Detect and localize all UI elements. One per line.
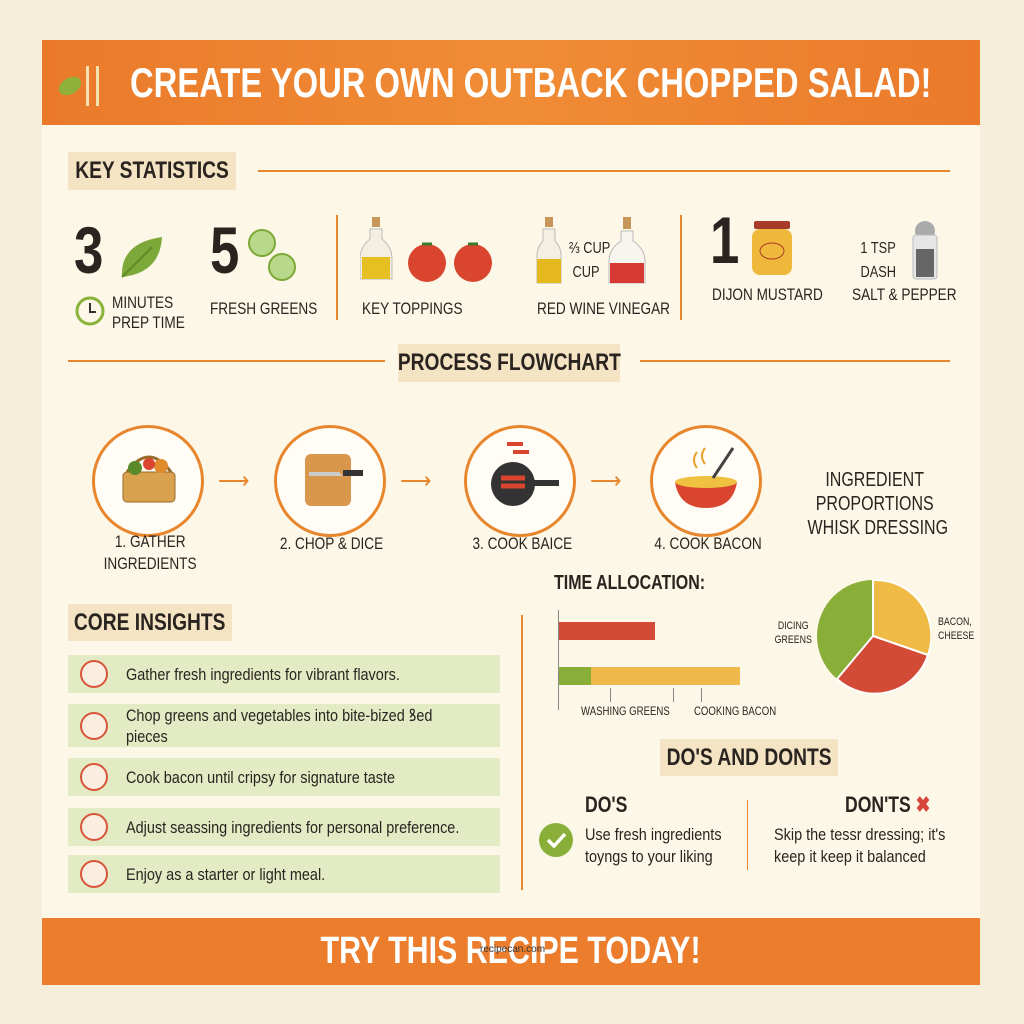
icon: leaf and fork — [58, 66, 99, 106]
header banner — [42, 40, 980, 125]
stat: 3 minutes — [74, 213, 185, 332]
stat: red wine vinegar: RED WINE VINEGAR — [537, 299, 670, 318]
heading: core insights: CORE INSIGHTS — [74, 608, 226, 636]
stat: 3 minutes: MINUTES — [112, 293, 173, 312]
flow step 1: 1. GATHER — [115, 532, 185, 551]
bar chart: time allocation: TIME ALLOCATION: — [554, 572, 705, 594]
pie chart: BACON, — [938, 616, 972, 628]
pie chart: GREENS — [775, 634, 812, 646]
do's: toyngs to your liking — [585, 847, 713, 866]
ingredient proportions text — [808, 469, 948, 539]
flow step 1: INGREDIENTS — [104, 554, 196, 573]
heading: core insights — [68, 604, 232, 641]
footer banner — [42, 918, 980, 985]
pie chart: CHEESE — [938, 630, 974, 642]
stat: salt & pepper — [852, 221, 957, 304]
ingredient proportions text: PROPORTIONS — [816, 493, 934, 515]
don'ts: keep it keep it balanced — [774, 847, 926, 866]
flow step 3 — [464, 425, 576, 553]
flow step 1 — [92, 425, 204, 573]
stat: dijon mustard: 1 — [710, 203, 739, 277]
flow step 2: 2. CHOP & DICE — [280, 534, 384, 553]
stat: 5 fresh greens: 5 — [210, 213, 239, 287]
flow step 3: 3. COOK BAICE — [472, 534, 572, 553]
stat: dijon mustard: DIJON MUSTARD — [712, 285, 823, 304]
insights list: Adjust seassing ingredients for personal preference. — [126, 818, 459, 836]
arrow: ⟶ — [400, 468, 432, 493]
heading: do's and don'ts — [660, 739, 838, 776]
stat: red wine vinegar: CUP — [573, 264, 600, 281]
pie chart — [775, 579, 974, 694]
stats row — [74, 203, 957, 332]
stat: 3 minutes: PREP TIME — [112, 313, 185, 332]
stat: key toppings — [360, 217, 492, 318]
insights list: Enjoy as a starter or light meal. — [126, 864, 325, 884]
do's: Use fresh ingredients — [585, 825, 722, 844]
stat: red wine vinegar — [536, 217, 670, 318]
do's — [539, 792, 722, 866]
flow step 4: 4. COOK BACON — [654, 534, 762, 553]
flow step 2 — [274, 425, 386, 553]
bar chart: time allocation: WASHING GREENS — [581, 704, 670, 718]
stat: red wine vinegar: ⅔ CUP — [569, 240, 610, 257]
do's: DO'S — [585, 792, 627, 817]
stat: key toppings: KEY TOPPINGS — [362, 299, 463, 318]
stat: 3 minutes: 3 — [74, 213, 103, 287]
don'ts: DON'TS ✖ — [845, 792, 930, 817]
title: CREATE YOUR OWN OUTBACK CHOPPED SALAD! — [130, 58, 932, 106]
ingredient proportions text: INGREDIENT — [826, 469, 924, 491]
flow step 4 — [650, 425, 762, 553]
insights list: Gather fresh ingredients for vibrant flavors. — [126, 664, 400, 684]
insights list — [68, 655, 500, 893]
don'ts — [774, 792, 945, 866]
stat: 5 fresh greens — [210, 213, 317, 318]
bar chart: time allocation: COOKING BACON — [694, 704, 776, 718]
heading: do's and don'ts: DO'S AND DONTS — [667, 744, 831, 770]
arrow: ⟶ — [218, 468, 250, 493]
arrow: ⟶ — [590, 468, 622, 493]
stat: dijon mustard — [710, 203, 823, 304]
ingredient proportions text: WHISK DRESSING — [808, 517, 948, 539]
stat: salt & pepper: SALT & PEPPER — [852, 285, 957, 304]
stat: salt & pepper: DASH — [860, 264, 896, 281]
stat: 5 fresh greens: FRESH GREENS — [210, 299, 317, 318]
footer banner: TRY THIS RECIPE TODAY! — [321, 930, 701, 972]
heading: key statistics: KEY STATISTICS — [75, 157, 229, 184]
stat: salt & pepper: 1 TSP — [861, 240, 896, 257]
insights list: Chop greens and vegetables into bite-bized ꝸed pieces — [126, 706, 432, 746]
footer banner: recipecan.com — [480, 944, 545, 955]
heading: key statistics — [68, 152, 236, 190]
heading: process flowchart: PROCESS FLOWCHART — [398, 349, 620, 376]
pie chart: DICING — [778, 620, 809, 632]
don'ts: Skip the tessr dressing; it's — [774, 825, 945, 844]
insights list: Cook bacon until cripsy for signature taste — [126, 768, 395, 786]
bar chart: time allocation — [554, 572, 776, 718]
